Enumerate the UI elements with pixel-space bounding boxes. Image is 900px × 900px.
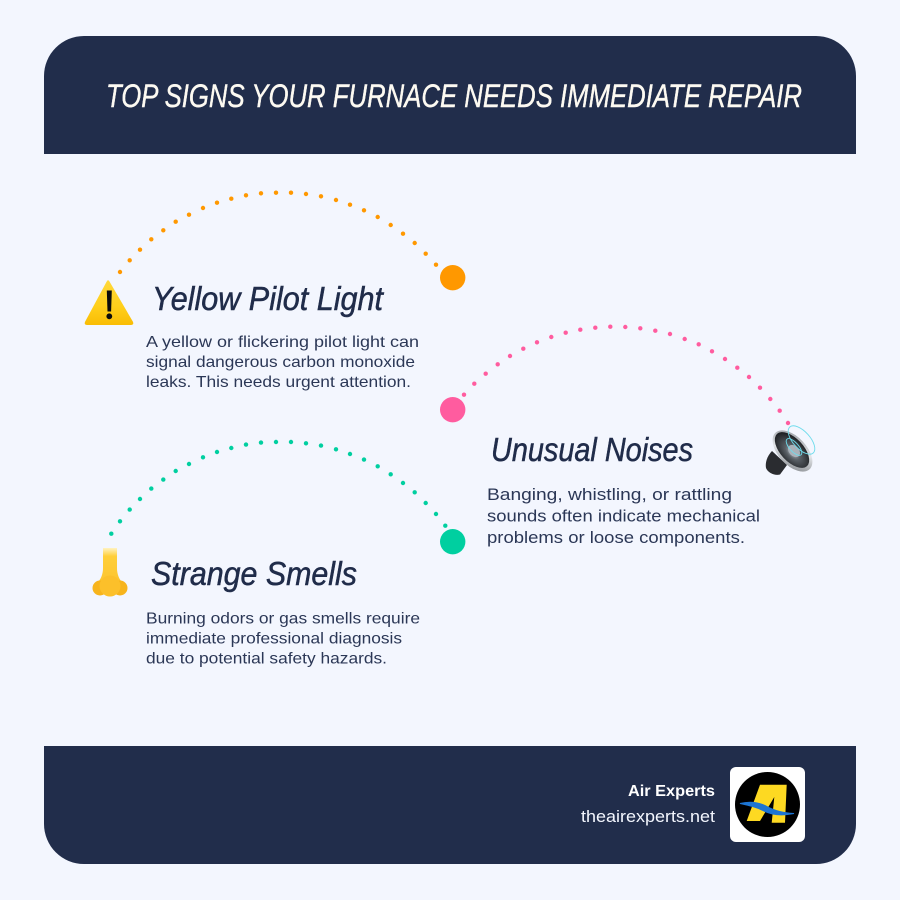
pink marker	[440, 397, 465, 422]
body text: signal dangerous carbon monoxide	[146, 354, 415, 371]
body text	[487, 485, 760, 547]
body text: Burning odors or gas smells require	[146, 610, 420, 628]
body text	[146, 610, 420, 668]
heading: Yellow Pilot Light	[152, 280, 385, 317]
header band	[44, 36, 856, 154]
website: theairexperts.net	[581, 808, 715, 826]
orange marker	[440, 265, 465, 290]
panel: yellow pilot light	[85, 190, 465, 391]
icon: speaker	[765, 421, 820, 479]
dotted arc: orange	[118, 190, 438, 274]
panel: strange smells	[92, 440, 465, 668]
dotted arc: pink	[462, 324, 790, 425]
heading: Strange Smells	[151, 555, 357, 592]
dotted arc: teal	[109, 440, 447, 536]
footer band	[44, 746, 856, 864]
panel: unusual noises	[440, 324, 820, 547]
body text: Banging, whistling, or rattling	[487, 485, 732, 504]
heading: Unusual Noises	[491, 431, 693, 468]
body text	[146, 334, 419, 391]
logo	[730, 767, 805, 842]
body text: sounds often indicate mechanical	[487, 506, 760, 526]
body text: due to potential safety hazards.	[146, 650, 387, 668]
body text: immediate professional diagnosis	[146, 630, 402, 648]
icon: nose	[92, 548, 128, 596]
body text: problems or loose components.	[487, 528, 745, 547]
body text: A yellow or flickering pilot light can	[146, 334, 419, 351]
body text: leaks. This needs urgent attention.	[146, 374, 411, 391]
teal marker	[440, 529, 465, 554]
icon: warning triangle	[85, 281, 133, 324]
brand name: Air Experts	[628, 783, 715, 800]
